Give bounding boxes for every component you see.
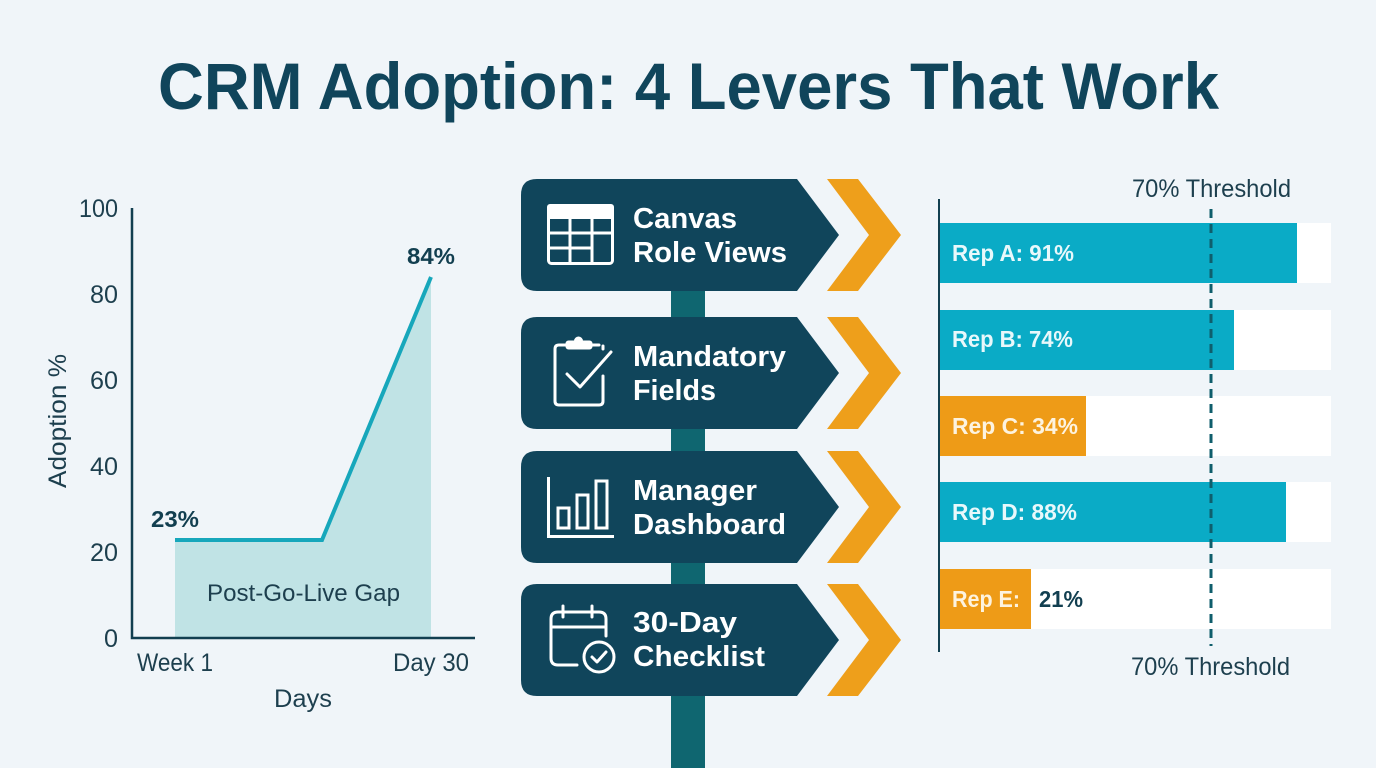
sign label: Manager [633, 475, 757, 507]
bar: Rep D [939, 482, 1331, 542]
70% threshold line [1210, 209, 1212, 646]
bar chart axis [938, 199, 940, 652]
chevron arrow [827, 584, 901, 696]
adoption trend line [175, 277, 431, 540]
y axis ticks: 80 [90, 281, 118, 309]
sign label: Mandatory [633, 341, 786, 373]
y axis title: Adoption % [44, 354, 72, 488]
bar: Rep B: Rep B: 74% [952, 326, 1073, 352]
y axis ticks: 60 [90, 367, 118, 395]
x axis label: Day 30: Day 30 [393, 649, 469, 677]
title: CRM Adoption: 4 Levers That Work [158, 49, 1219, 123]
bar: Rep A [939, 223, 1331, 283]
y axis ticks: 20 [90, 539, 118, 567]
sign label [633, 475, 786, 541]
bar: Rep B [939, 310, 1331, 370]
bar: Rep C [939, 396, 1331, 456]
sign: Canvas Role Views [521, 179, 901, 291]
chevron arrow [827, 317, 901, 429]
icon: table [547, 204, 614, 264]
icon: clipboard with check [555, 338, 611, 405]
chart area fill [175, 277, 431, 638]
threshold label top: 70% Threshold [1132, 175, 1291, 203]
sign label: Canvas [633, 203, 737, 235]
value label: 23%: 23% [151, 506, 199, 532]
sign label [633, 203, 787, 269]
sign label: Fields [633, 375, 716, 407]
x axis title: Days [274, 685, 332, 713]
icon: calendar with check [551, 606, 614, 672]
y axis ticks: 100 [79, 195, 118, 223]
sign: 30-Day Checklist [521, 584, 901, 696]
sign label [633, 607, 765, 673]
chevron arrow [827, 179, 901, 291]
threshold label bottom: 70% Threshold [1131, 653, 1290, 681]
bar: Rep D: Rep D: 88% [952, 499, 1077, 525]
y axis ticks: 40 [90, 453, 118, 481]
bar: Rep E: Rep E: [952, 586, 1020, 612]
value label: 84%: 84% [407, 243, 455, 269]
sign: Manager Dashboard [521, 451, 901, 563]
panel: rep adoption bar chart [939, 175, 1331, 681]
chart axes [132, 208, 475, 638]
y axis ticks: 0 [104, 625, 118, 653]
x axis label: Week 1: Week 1 [137, 649, 213, 677]
sign label: Checklist [633, 641, 765, 673]
chevron arrow [827, 451, 901, 563]
sign label: Role Views [633, 237, 787, 269]
panel: adoption line chart [44, 195, 475, 713]
sign label [633, 341, 786, 407]
signpost pole [671, 285, 705, 768]
sign label: Dashboard [633, 509, 786, 541]
bar: Rep C: Rep C: 34% [952, 413, 1078, 439]
sign label: 30-Day [633, 607, 737, 639]
bar: Rep E: 21% [1039, 586, 1083, 612]
y axis ticks [79, 195, 118, 653]
sign: Mandatory Fields [521, 317, 901, 429]
area label: Post-Go-Live Gap [207, 580, 400, 607]
bar: Rep A: Rep A: 91% [952, 240, 1074, 266]
icon: bar chart [548, 477, 614, 536]
bar: Rep E [939, 569, 1331, 629]
